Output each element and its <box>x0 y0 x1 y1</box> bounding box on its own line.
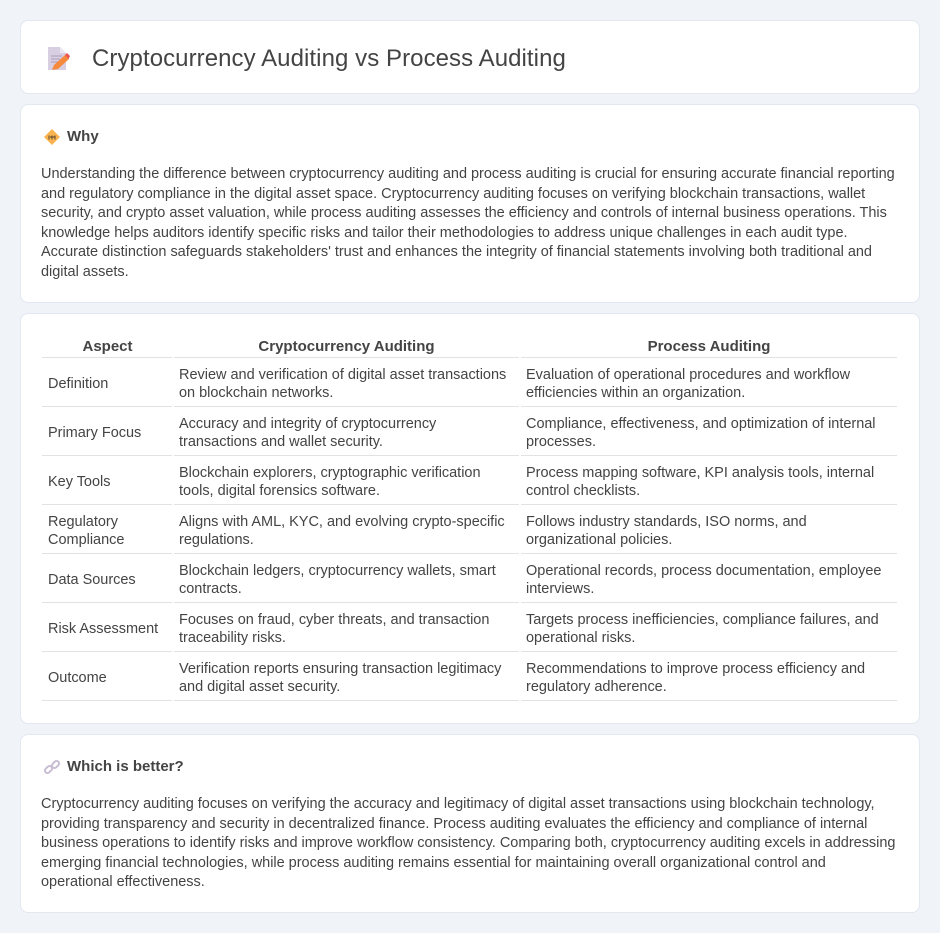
text block: which is better: providing transparency and security in decentralized finance. Process auditing evaluates the efficiency and compliance of internal <box>41 816 867 832</box>
row: definition: on blockchain networks. <box>179 385 333 401</box>
text block: which is better: business operations to identify risks and improve workflow consistency. Comparing both, cryptocurrency auditing excels in addressing <box>41 835 895 851</box>
row: data sources: interviews. <box>526 581 594 597</box>
row: primary focus: Primary Focus <box>48 425 141 441</box>
row: primary focus: transactions and wallet security. <box>179 434 383 450</box>
row: key tools <box>48 465 874 499</box>
panel: why <box>20 104 920 303</box>
row: risk assessment: traceability risks. <box>179 630 286 646</box>
row: outcome: Recommendations to improve process efficiency and <box>526 661 865 677</box>
row: primary focus: Accuracy and integrity of cryptocurrency <box>179 416 436 432</box>
row: key tools: tools, digital forensics software. <box>179 483 380 499</box>
text block: why: knowledge helps auditors identify specific risks and tailor their methodologies to address unique challenges in each audit type. <box>41 225 848 241</box>
row: risk assessment <box>48 612 879 646</box>
row: outcome: regulatory adherence. <box>526 679 667 695</box>
row: regulatory compliance: Compliance <box>48 532 124 548</box>
row: outcome: Outcome <box>48 670 107 686</box>
row: regulatory compliance: regulations. <box>179 532 254 548</box>
header card <box>20 20 920 94</box>
row: regulatory compliance: Follows industry standards, ISO norms, and <box>526 514 807 530</box>
row: primary focus <box>48 416 876 450</box>
row: data sources: Operational records, process documentation, employee <box>526 563 881 579</box>
text block: which is better <box>41 796 895 890</box>
row: risk assessment: operational risks. <box>526 630 635 646</box>
row: regulatory compliance: organizational policies. <box>526 532 672 548</box>
row: data sources: Data Sources <box>48 572 136 588</box>
row: definition <box>48 367 850 401</box>
row: data sources: contracts. <box>179 581 242 597</box>
text block: which is better: operational effectiveness. <box>41 874 205 890</box>
table header: Process Auditing <box>648 338 770 355</box>
text block: why: and regulatory compliance in the digital asset space. Cryptocurrency auditing focuses on verifying blockchain transactions, wallet <box>41 186 865 202</box>
row: data sources <box>48 563 881 597</box>
row: regulatory compliance <box>48 514 807 548</box>
table header: Cryptocurrency Auditing <box>258 338 435 355</box>
row: outcome: and digital asset security. <box>179 679 340 695</box>
row: risk assessment: Focuses on fraud, cyber threats, and transaction <box>179 612 489 628</box>
icon: diamond sign <box>44 129 60 145</box>
row: regulatory compliance: Regulatory <box>48 514 118 530</box>
panel: comparison table <box>20 313 920 724</box>
row: risk assessment: Risk Assessment <box>48 621 158 637</box>
text block: why: security, and crypto asset valuation, while process auditing assesses the efficiency and controls of internal business operations. This <box>41 205 887 221</box>
row: primary focus: processes. <box>526 434 596 450</box>
text block: which is better: Cryptocurrency auditing focuses on verifying the accuracy and legitimacy of digital asset transactions using blockchain technology, <box>41 796 875 812</box>
heading: why: Why <box>67 128 99 145</box>
text block: why: Understanding the difference between cryptocurrency auditing and process auditing is crucial for ensuring accurate financial reporting <box>41 166 895 182</box>
heading: which is better: Which is better? <box>67 758 184 775</box>
icon: link <box>44 760 60 774</box>
row: definition: Evaluation of operational procedures and workflow <box>526 367 850 383</box>
text block: why: digital assets. <box>41 264 129 280</box>
row: definition: Definition <box>48 376 108 392</box>
row: outcome <box>48 661 865 695</box>
row: risk assessment: Targets process inefficiencies, compliance failures, and <box>526 612 879 628</box>
table header: Aspect <box>82 338 133 355</box>
text block: which is better: emerging financial technologies, while process auditing remains essential for maintaining overall organizational control and <box>41 855 826 871</box>
row: key tools: Process mapping software, KPI analysis tools, internal <box>526 465 874 481</box>
row: key tools: Blockchain explorers, cryptographic verification <box>179 465 481 481</box>
row: key tools: control checklists. <box>526 483 640 499</box>
text block: why <box>41 166 895 280</box>
table header <box>82 338 770 355</box>
row: outcome: Verification reports ensuring transaction legitimacy <box>179 661 501 677</box>
icon: document with pencil <box>48 47 70 70</box>
row: regulatory compliance: Aligns with AML, KYC, and evolving crypto-specific <box>179 514 505 530</box>
panel: which is better <box>20 734 920 913</box>
row: definition: efficiencies within an organization. <box>526 385 745 401</box>
row: definition: Review and verification of digital asset transactions <box>179 367 506 383</box>
title: Cryptocurrency Auditing vs Process Auditing <box>92 45 566 72</box>
row: key tools: Key Tools <box>48 474 110 490</box>
row: data sources: Blockchain ledgers, cryptocurrency wallets, smart <box>179 563 496 579</box>
text block: why: Accurate distinction safeguards stakeholders' trust and enhances the integrity of financial statements involving both traditional and <box>41 244 872 260</box>
row: primary focus: Compliance, effectiveness, and optimization of internal <box>526 416 876 432</box>
